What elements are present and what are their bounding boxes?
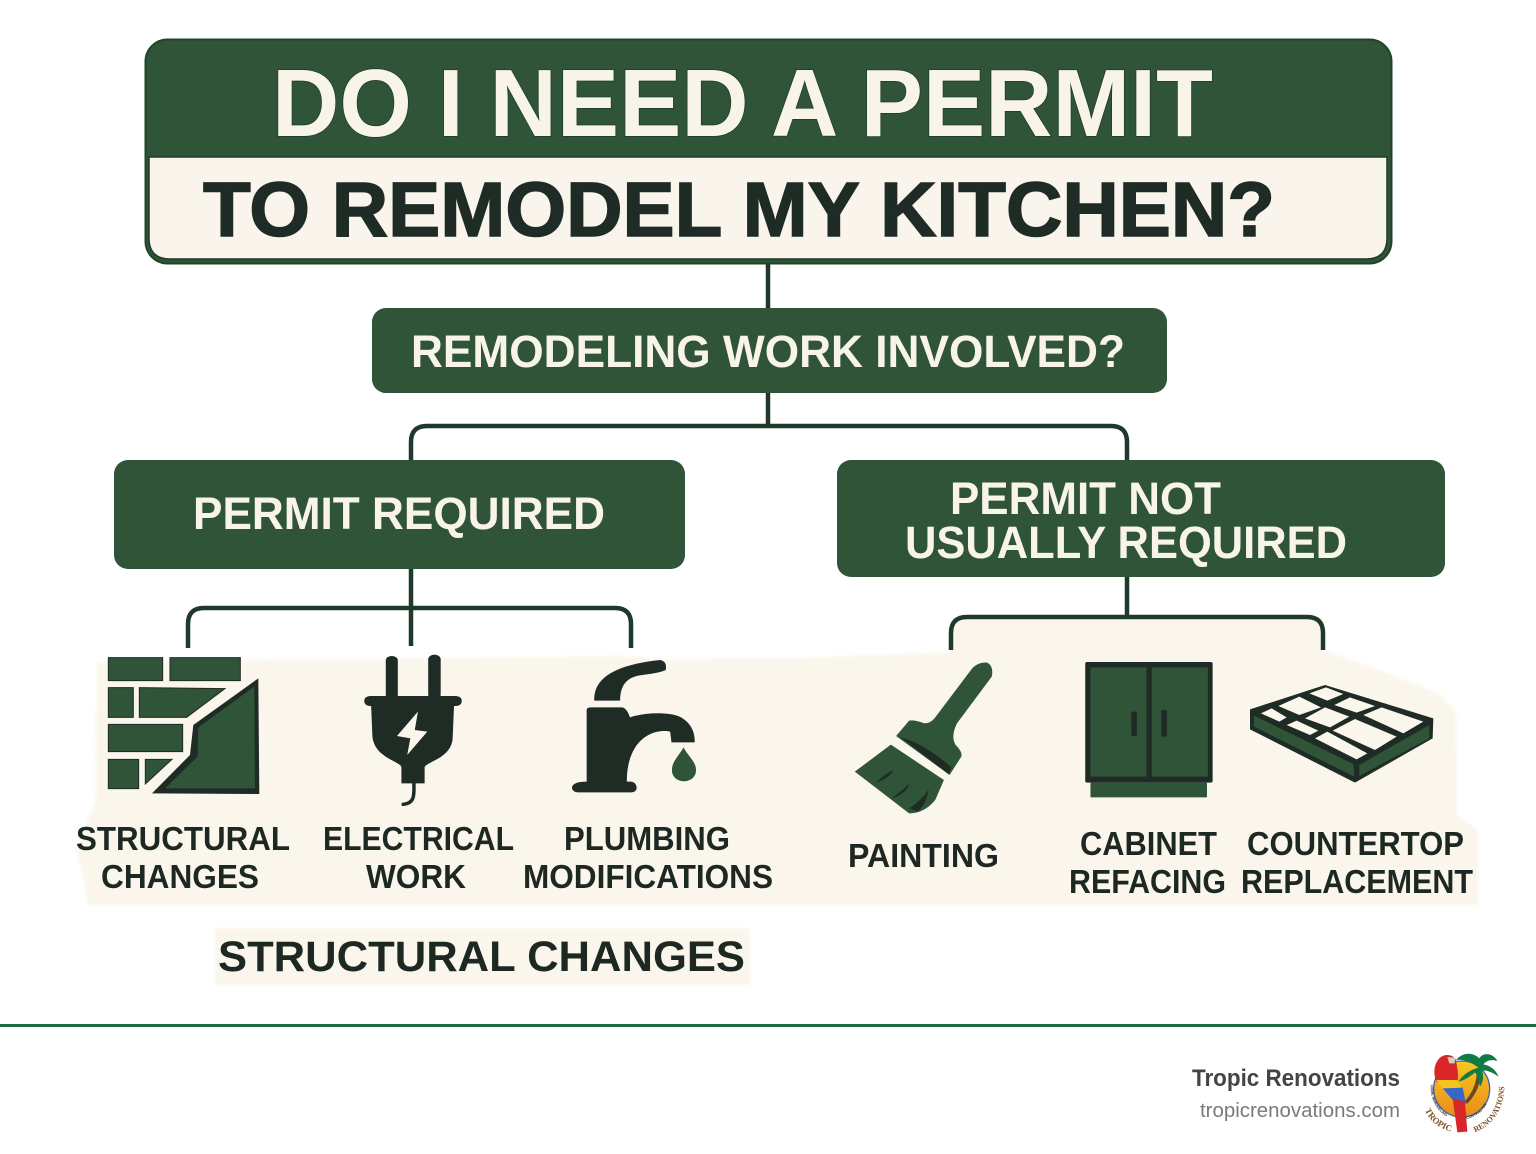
decision box: remodeling work involved xyxy=(372,308,1167,393)
label: structural changes: STRUCTURAL xyxy=(76,820,290,857)
label: cabinet refacing: CABINET xyxy=(1080,825,1217,862)
footer brand text: Tropic Renovations xyxy=(1192,1065,1400,1092)
label: electrical work: ELECTRICAL xyxy=(323,820,514,857)
label: plumbing modifications xyxy=(523,820,773,895)
label: cabinet refacing: REFACING xyxy=(1069,863,1226,900)
icon: cabinet xyxy=(1085,662,1213,797)
logo: Tropic Renovations: HOME REMODELING xyxy=(1430,1085,1448,1116)
label: structural changes xyxy=(76,820,290,895)
title banner xyxy=(146,40,1392,264)
icon: brick wall xyxy=(108,658,259,794)
label: structural changes: CHANGES xyxy=(101,858,259,895)
labels: no permit items xyxy=(848,825,1473,900)
box: permit required: PERMIT REQUIRED xyxy=(193,488,605,539)
label: countertop replacement: COUNTERTOP xyxy=(1247,825,1464,862)
label: electrical work xyxy=(323,820,514,895)
label: cabinet refacing xyxy=(1069,825,1226,900)
icon: electrical plug xyxy=(364,655,462,804)
logo: Tropic Renovations xyxy=(1426,1054,1504,1132)
title line 1: DO I NEED A PERMIT xyxy=(272,50,1213,157)
labels: permit required items xyxy=(76,820,773,895)
box: permit not usually required xyxy=(837,460,1445,577)
label: countertop replacement: REPLACEMENT xyxy=(1241,863,1473,900)
logo: Tropic Renovations: TROPIC xyxy=(1426,1108,1452,1132)
icon: countertop tiles xyxy=(1250,685,1433,783)
title line 2: TO REMODEL MY KITCHEN? xyxy=(203,167,1275,253)
decision box: remodeling work involved: REMODELING WORK INVOLVED? xyxy=(411,326,1125,377)
logo: Tropic Renovations: CONTRACTOR xyxy=(1466,1103,1487,1119)
label: plumbing modifications: MODIFICATIONS xyxy=(523,858,773,895)
footer brand text xyxy=(1192,1065,1400,1122)
logo: Tropic Renovations: RENOVATIONS xyxy=(1473,1086,1504,1132)
connector lines xyxy=(188,262,1323,650)
caption: structural changes: STRUCTURAL CHANGES xyxy=(218,933,745,981)
label: plumbing modifications: PLUMBING xyxy=(564,820,730,857)
box: permit not usually required: PERMIT NOT xyxy=(950,473,1221,524)
icon: faucet with drop xyxy=(572,660,696,792)
label: countertop replacement xyxy=(1241,825,1473,900)
box: permit required xyxy=(114,460,685,569)
label: electrical work: WORK xyxy=(366,858,466,895)
box: permit not usually required: USUALLY REQUIRED xyxy=(905,517,1347,568)
icon: paint brush xyxy=(855,663,992,813)
footer brand text: tropicrenovations.com xyxy=(1200,1100,1400,1122)
label: painting: PAINTING xyxy=(848,837,999,874)
